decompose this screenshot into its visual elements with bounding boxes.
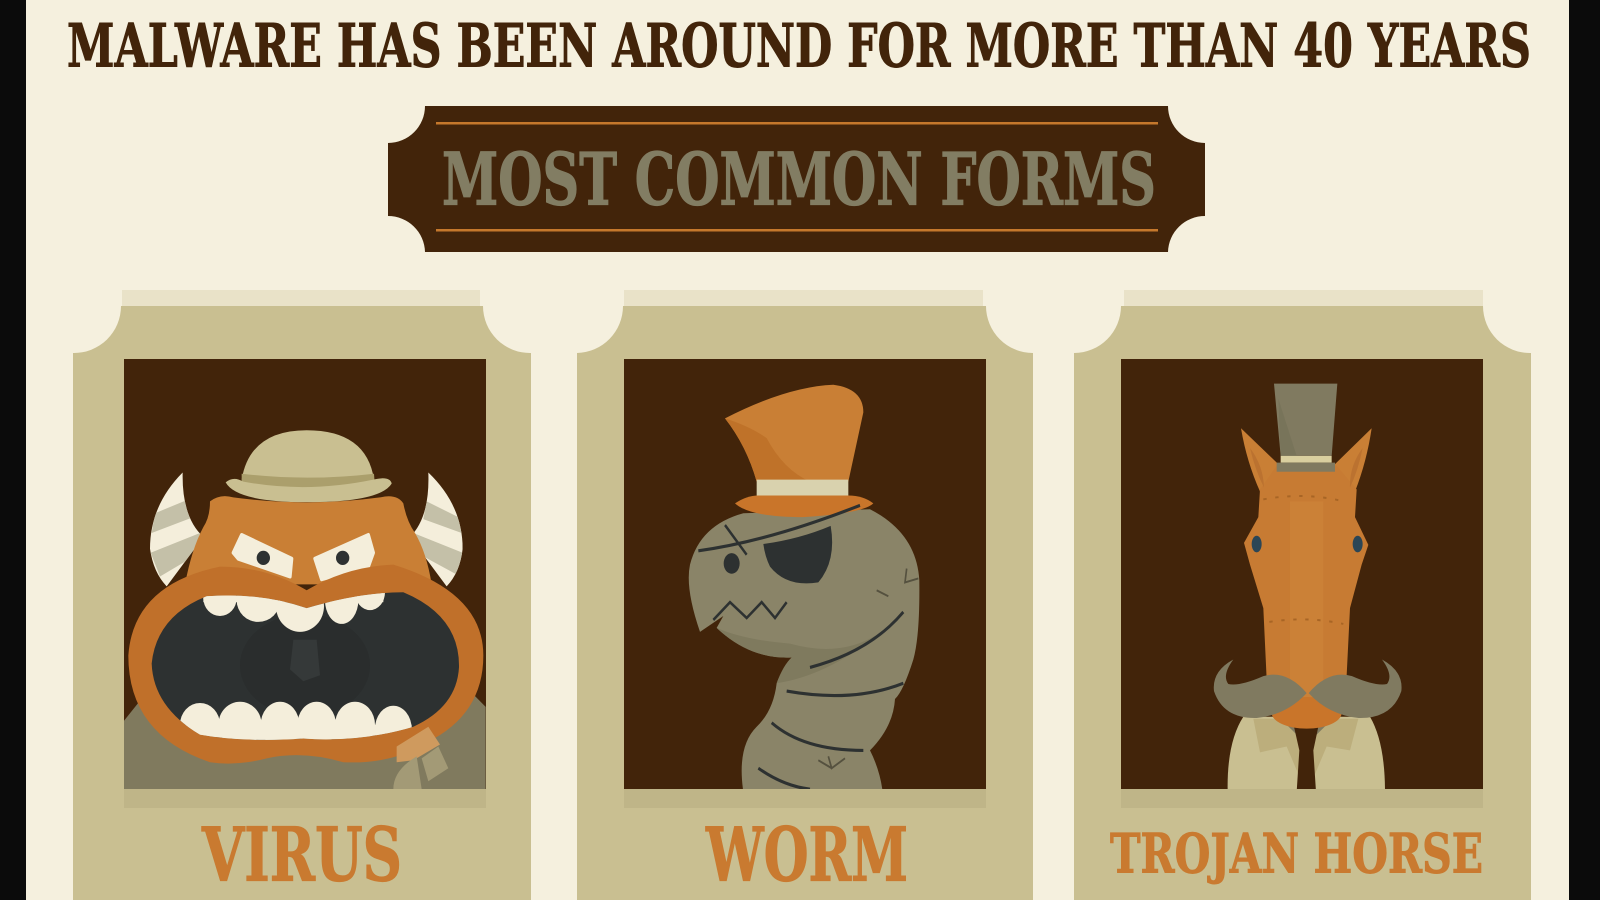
panel: worm card [577,290,1033,900]
label: worm: WORM [705,812,908,898]
panel: trojan horse card [1074,290,1531,900]
icon: horse with moustache [1214,384,1402,792]
icon: virus monster [124,430,486,794]
banner heading: MOST COMMON FORMS [442,136,1156,222]
icon: worm with eye patch and top hat [689,385,919,792]
label: virus: VIRUS [201,812,402,898]
banner: most common forms [388,106,1205,252]
panel: virus card [73,290,531,900]
label: trojan horse: TROJAN HORSE [1110,822,1483,886]
